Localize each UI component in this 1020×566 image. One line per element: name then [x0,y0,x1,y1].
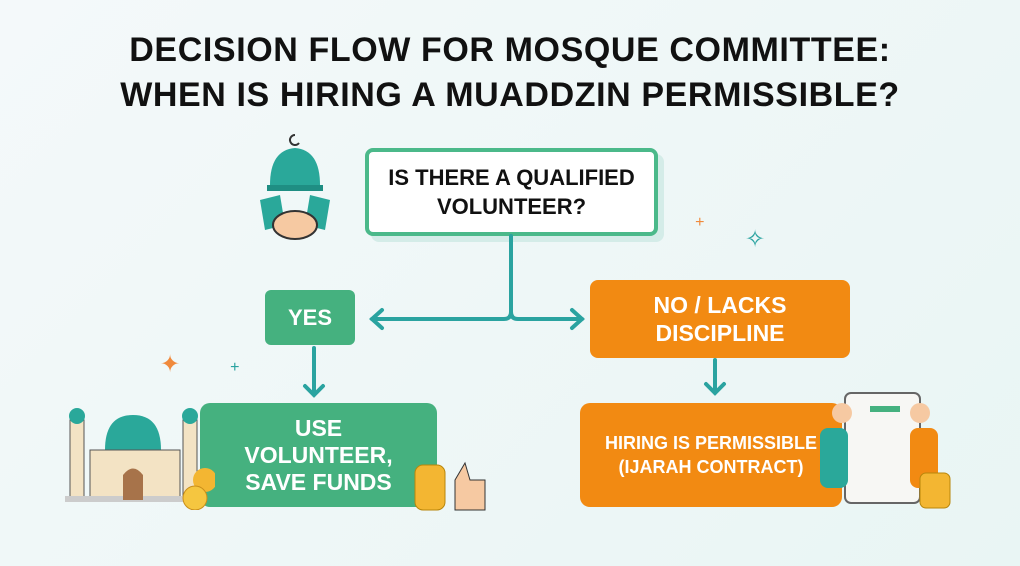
text: ✧+ [695,214,765,253]
hiring box [580,403,842,507]
yes box: YES [288,304,332,330]
no box: NO / LACKS [654,292,786,318]
no box [590,280,850,358]
yes box [265,290,355,345]
icon: coins thumbs up [414,462,486,510]
no box: DISCIPLINE [655,320,785,346]
question box: VOLUNTEER? [437,194,586,219]
use volunteer box: VOLUNTEER, [244,442,393,468]
question box: IS THERE A QUALIFIED [388,165,635,190]
hiring box: HIRING IS PERMISSIBLE [605,433,817,453]
hiring box: (IJARAH CONTRACT) [618,457,803,477]
icon: dome handshake [260,134,330,240]
icon: mosque [65,408,215,510]
title: WHEN IS HIRING A MUADDZIN PERMISSIBLE? [120,76,900,114]
title [120,31,900,114]
use volunteer box [200,403,437,507]
icon: contract and people [820,392,950,508]
question box [365,148,658,236]
title: DECISION FLOW FOR MOSQUE COMMITTEE: [129,31,891,69]
use volunteer box: SAVE FUNDS [245,468,392,494]
icon: decorative sparkles: ✦ + [160,351,239,378]
use volunteer box: USE [295,414,342,440]
